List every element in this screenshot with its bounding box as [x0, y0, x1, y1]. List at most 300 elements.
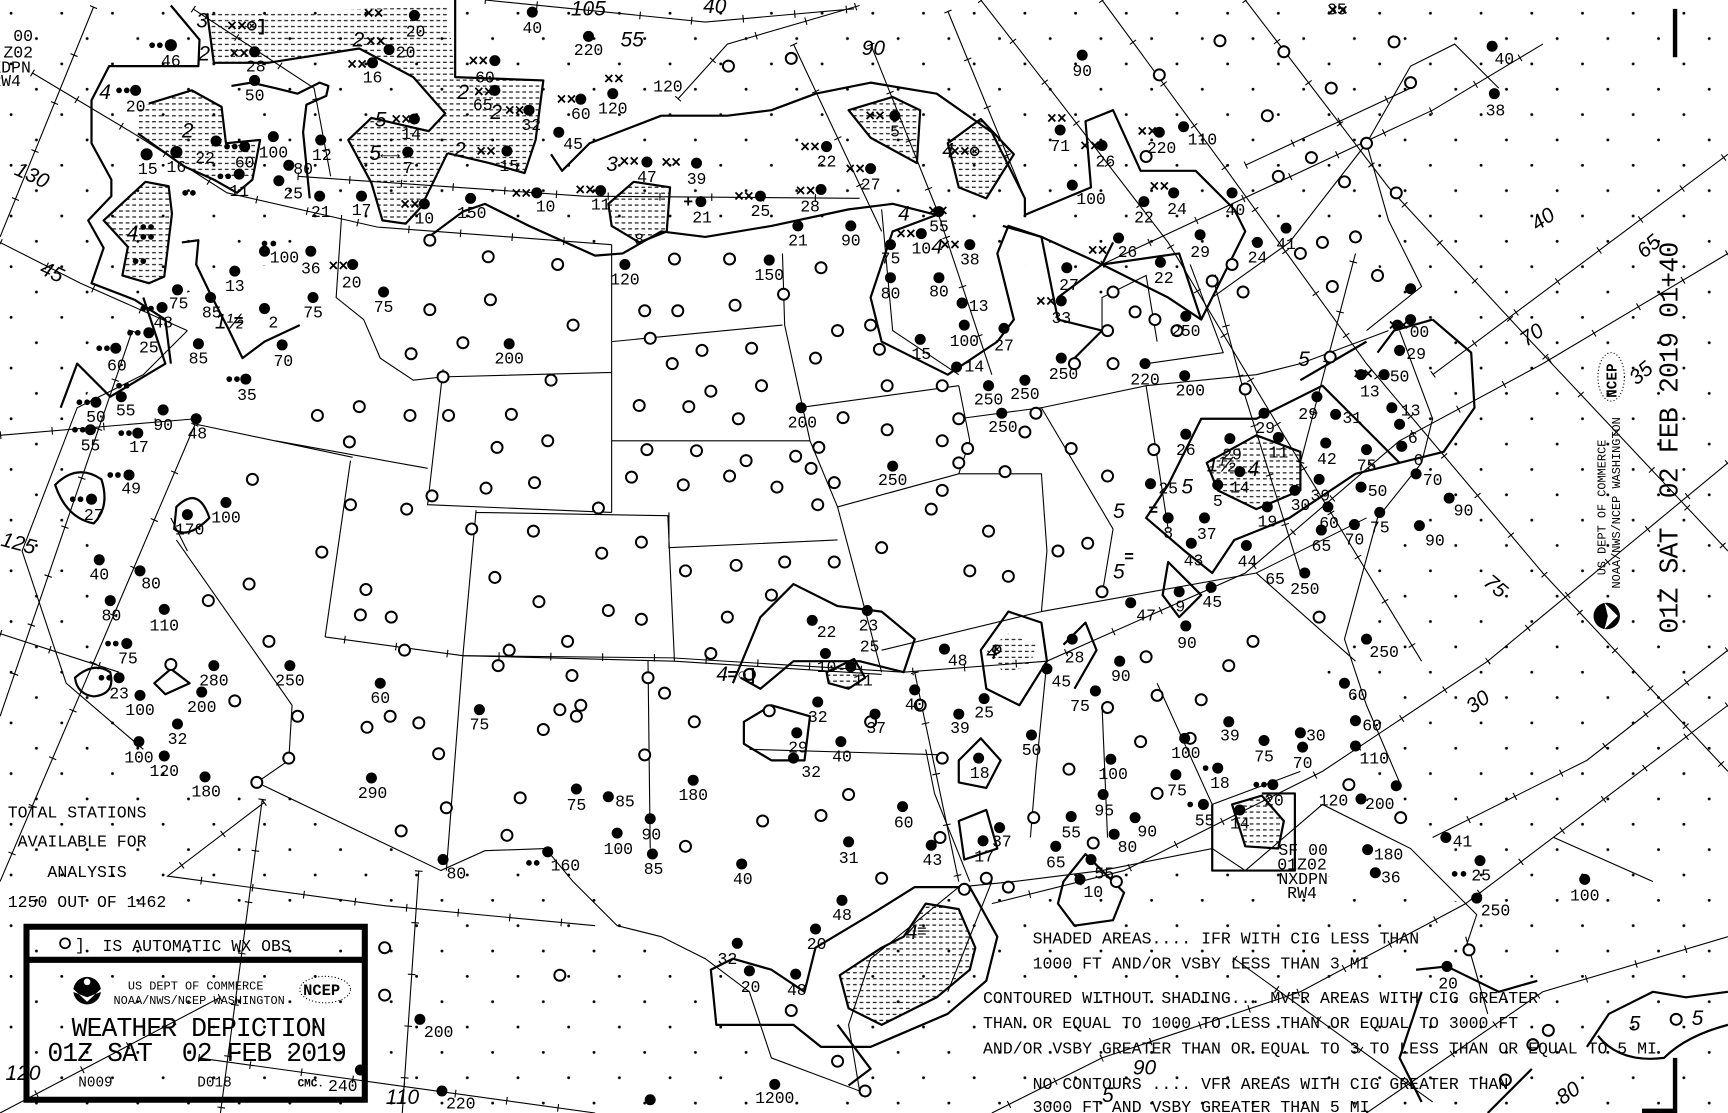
ceiling height labels: 85: [615, 793, 635, 812]
IFR shaded areas: [104, 7, 1300, 1025]
ceiling height labels: 49: [121, 480, 141, 499]
ceiling height labels: 26: [1176, 441, 1196, 460]
visibility values and grid labels: 55: [620, 28, 644, 51]
ceiling height labels: 150: [755, 266, 784, 285]
ceiling height labels: 100: [270, 248, 299, 267]
ceiling height labels: 20: [342, 274, 361, 293]
present weather snow and other symbols: ←→: [380, 145, 400, 164]
ceiling height labels: 200: [1175, 382, 1205, 401]
icon: rotated NCEP logo: NCEP: [1606, 363, 1622, 398]
visibility values and grid labels: 110: [386, 1086, 419, 1109]
ceiling height labels: 85: [644, 860, 663, 879]
present weather snow and other symbols: ××: [940, 236, 960, 255]
panel forecaster codes: [78, 1076, 324, 1092]
ceiling height labels: 5: [1213, 492, 1223, 511]
visibility values and grid labels: 2: [197, 43, 210, 66]
ceiling height labels: 37: [1197, 525, 1217, 544]
land mass clearing the ocean dot field: [66, 209, 1466, 1091]
ceiling height labels: 8: [1163, 524, 1173, 543]
present weather snow and other symbols: ××⊗]: [227, 17, 267, 36]
ceiling height labels: 100: [124, 749, 154, 768]
ceiling height labels: 17: [974, 848, 994, 867]
ceiling height labels: 25: [751, 202, 770, 221]
ceiling height labels: 32: [521, 116, 541, 135]
ceiling height labels: 80: [293, 160, 313, 179]
ceiling height labels: 11: [591, 195, 611, 214]
ceiling height labels: 45: [563, 135, 583, 154]
ceiling height labels: 29: [1190, 243, 1210, 262]
ceiling height labels: 25: [860, 637, 879, 656]
present weather snow and other symbols: ××: [796, 182, 816, 201]
ceiling height labels: 5: [890, 123, 900, 142]
ceiling height labels: 25: [283, 184, 303, 203]
ceiling height labels: 85: [189, 350, 208, 369]
ceiling height labels: 200: [187, 698, 216, 717]
ceiling height labels: 48: [832, 906, 852, 925]
ceiling height labels: 21: [788, 232, 808, 251]
ceiling height labels: 75: [881, 249, 900, 268]
ceiling height labels: 45: [1202, 593, 1222, 612]
present weather snow and other symbols: ××: [505, 102, 525, 121]
ceiling height labels: 20: [1264, 792, 1284, 811]
ceiling height labels: 25: [974, 703, 994, 722]
visibility values and grid labels: 3: [196, 10, 208, 33]
present weather snow and other symbols: ××: [845, 160, 865, 179]
ceiling height labels: 13: [969, 297, 988, 316]
present weather snow and other symbols: ××: [1047, 109, 1067, 128]
present weather snow and other symbols: ××: [364, 5, 384, 24]
ceiling height labels: 21: [311, 203, 331, 222]
present weather snow and other symbols: +: [683, 193, 693, 212]
ceiling height labels: 43: [923, 851, 942, 870]
present weather snow and other symbols: ××: [1088, 242, 1108, 261]
ceiling height labels: 10: [911, 239, 931, 258]
visibility values and grid labels: 3: [606, 153, 618, 176]
present weather snow and other symbols: ××: [328, 257, 348, 276]
registration mark: top right: [1673, 9, 1677, 57]
visibility values and grid labels: 4: [986, 641, 998, 664]
agency text: [114, 980, 285, 1008]
ceiling height labels: 29: [1298, 405, 1318, 424]
ceiling height labels: 75: [1357, 457, 1376, 476]
ceiling height labels: 180: [1374, 846, 1403, 865]
ceiling height labels: 10: [415, 210, 434, 229]
ceiling height labels: 250: [1290, 580, 1319, 599]
visibility values and grid labels: 65: [1633, 230, 1666, 263]
ceiling height labels: 55: [929, 217, 949, 236]
ceiling height labels: 20: [741, 978, 760, 997]
ceiling height labels: 24: [1167, 200, 1187, 219]
ceiling height labels: 90: [642, 826, 661, 845]
ceiling height labels: 80: [881, 285, 900, 304]
ceiling height labels: 30: [1291, 496, 1310, 515]
legend notes: flight category definitions: 1000 FT AND/OR VSBY LESS THAN 3 MI: [1033, 955, 1370, 974]
ceiling height labels: 13: [1360, 383, 1380, 402]
ceiling height labels: 2: [268, 313, 278, 332]
visibility values and grid labels: 2: [352, 28, 365, 51]
ceiling height labels: 220: [574, 41, 603, 60]
ceiling height labels: 10: [1083, 883, 1103, 902]
visibility values and grid labels: 2: [181, 120, 194, 143]
present weather snow and other symbols: ××: [619, 152, 639, 171]
legend notes: flight category definitions: SHADED AREAS.... IFR WITH CIG LESS THAN: [1033, 929, 1419, 948]
ceiling height labels: 60: [1362, 717, 1382, 736]
ceiling height labels: 32: [168, 730, 187, 749]
visibility values and grid labels: 5: [1113, 500, 1125, 523]
present weather snow and other symbols: ××: [1080, 137, 1100, 156]
ceiling height labels: 40: [905, 696, 924, 715]
ceiling height labels: 29: [1255, 419, 1275, 438]
present weather snow and other symbols: ××: [865, 107, 885, 126]
ceiling height labels: 23: [109, 685, 129, 704]
visibility values and grid labels: 4: [898, 202, 910, 225]
ceiling height labels: 60: [1319, 514, 1339, 533]
present weather snow and other symbols: ××: [511, 184, 531, 203]
chart id block, lower: NXDPN: [1278, 870, 1328, 889]
ceiling height labels: 25: [139, 339, 159, 358]
visibility values and grid labels: 4: [716, 663, 728, 686]
ceiling height labels: 20: [406, 22, 425, 41]
ceiling height labels: 10: [817, 658, 836, 677]
present weather snow and other symbols: ××: [604, 70, 624, 89]
visibility values and grid labels: 5: [1102, 1084, 1114, 1107]
present weather snow and other symbols: ××: [661, 154, 681, 173]
total stations text block: TOTAL STATIONS: [8, 804, 147, 823]
panel forecaster codes: D018: [197, 1076, 232, 1092]
ceiling height labels: 11: [229, 182, 249, 201]
ceiling height labels: 48: [948, 652, 967, 671]
ceiling height labels: 250: [1049, 365, 1078, 384]
ceiling height labels: 27: [84, 506, 104, 525]
ceiling height labels: 39: [687, 170, 706, 189]
ceiling height labels: 29: [788, 739, 808, 758]
ceiling height labels: 17: [129, 438, 149, 457]
ceiling height labels: 21: [692, 209, 712, 228]
ceiling height labels: 180: [678, 786, 708, 805]
present weather snow and other symbols: ××: [476, 142, 496, 161]
ceiling height labels: 90: [841, 232, 861, 251]
ceiling height labels: 50: [1368, 482, 1387, 501]
ceiling height labels: 48: [787, 981, 807, 1000]
agency text: NOAA/NWS/NCEP WASHINGTON: [114, 994, 285, 1008]
ceiling height labels: 100: [125, 701, 155, 720]
ceiling height labels: 11: [1269, 443, 1288, 462]
icon: NCEP logo: [300, 976, 350, 1003]
chart id block, upper left: [0, 27, 33, 91]
ceiling height labels: 160: [551, 857, 580, 876]
ceiling height labels: 100: [950, 332, 979, 351]
total stations text block: AVAILABLE FOR: [18, 832, 147, 851]
ceiling height labels: 55: [1195, 811, 1214, 830]
chart id block, upper left: Z02: [3, 43, 33, 62]
ceiling height labels: 11: [853, 671, 873, 690]
ceiling height labels: 100: [1171, 744, 1200, 763]
total stations text block: ANALYSIS: [47, 863, 127, 882]
present weather snow and other symbols: ××: [734, 188, 754, 207]
ceiling height labels: 9: [1175, 598, 1185, 617]
ceiling height labels: 60: [894, 814, 913, 833]
ceiling height labels: 20: [126, 97, 145, 116]
visibility values and grid labels: 5: [375, 109, 387, 132]
ceiling height labels: 00: [1410, 323, 1429, 342]
ceiling height labels: 28: [246, 58, 266, 77]
ceiling height labels: 55: [1061, 824, 1081, 843]
present weather snow and other symbols: ××: [1149, 178, 1169, 197]
ceiling height labels: 110: [1188, 130, 1217, 149]
ceiling height labels: 37: [992, 832, 1012, 851]
ceiling height labels: 31: [839, 849, 859, 868]
visibility values and grid labels: 5: [1298, 348, 1310, 371]
ceiling height labels: 22: [1154, 269, 1174, 288]
ceiling height labels: 120: [1319, 792, 1348, 811]
ceiling height labels: 70: [1345, 530, 1364, 549]
ceiling height labels: 90: [1137, 822, 1157, 841]
ceiling height labels: 50: [86, 408, 106, 427]
visibility values and grid labels: 2: [489, 101, 502, 124]
chart id block, lower: RW4: [1287, 884, 1317, 903]
visibility values and grid labels: 2: [456, 81, 469, 104]
ceiling height labels: 250: [1481, 902, 1510, 921]
box frame: [26, 927, 365, 1100]
ceiling height labels: 47: [637, 168, 657, 187]
rotated agency credit: US DEPT OF COMMERCE: [1596, 440, 1610, 575]
legend notes: flight category definitions: AND/OR VSBY GREATER THAN OR EQUAL TO 3 TO LESS THAN OR EQUAL TO 5 MI: [983, 1039, 1657, 1058]
ceiling height labels: 180: [191, 783, 221, 802]
ceiling height labels: 44: [1238, 552, 1257, 571]
ceiling height labels: 290: [358, 784, 387, 803]
visibility values and grid labels: 5: [1692, 1007, 1704, 1030]
ceiling height labels: 250: [1010, 385, 1040, 404]
ceiling height labels: 14: [401, 125, 421, 144]
ceiling height labels: 120: [150, 762, 179, 781]
ceiling height labels: 110: [150, 616, 179, 635]
ceiling height labels: 22: [195, 149, 215, 168]
present weather snow and other symbols: ××: [928, 202, 948, 221]
ceiling height labels: 22: [817, 152, 836, 171]
ceiling height labels: 250: [878, 471, 907, 490]
ceiling height labels: 170: [175, 520, 204, 539]
ceiling height labels: 120: [598, 100, 627, 119]
ceiling height labels: 200: [1365, 795, 1394, 814]
ceiling height labels: 110: [1360, 750, 1389, 769]
ceiling height labels: 41: [1453, 832, 1472, 851]
ceiling height labels: 20: [1438, 974, 1458, 993]
present weather snow and other symbols: ××: [468, 52, 488, 71]
ceiling height labels: 16: [167, 158, 186, 177]
ceiling height labels: 75: [303, 303, 323, 322]
ceiling height labels: 41: [1276, 235, 1296, 254]
ceiling height labels: 15: [911, 345, 931, 364]
ceiling height labels: 40: [1494, 50, 1514, 69]
ceiling height labels: 29: [1406, 345, 1426, 364]
present weather snow and other symbols: =: [1124, 548, 1134, 567]
chart id block, lower: 01Z02: [1277, 855, 1327, 874]
ceiling height labels: 100: [1570, 886, 1599, 905]
ceiling height labels: 28: [800, 198, 820, 217]
ceiling height labels: 31: [1342, 409, 1362, 428]
ceiling height labels: 7: [403, 159, 413, 178]
present weather snow and other symbols: ××: [896, 225, 916, 244]
legend notes: flight category definitions: CONTOURED WITHOUT SHADING... MVFR AREAS WITH CIG GREATER: [983, 989, 1538, 1008]
visibility values and grid labels: 4: [99, 81, 111, 104]
ceiling height labels: 42: [1317, 450, 1337, 469]
ceiling height labels: 80: [102, 606, 121, 625]
ceiling height labels: 75: [1070, 697, 1090, 716]
ceiling height labels: 55: [81, 437, 100, 456]
ceiling height labels: 80: [446, 864, 466, 883]
ceiling height labels: 80: [141, 574, 161, 593]
ceiling height labels: 75: [1167, 782, 1187, 801]
total stations text block: 1250 OUT OF 1462: [8, 893, 166, 912]
present weather snow and other symbols: ××: [1036, 292, 1056, 311]
ceiling height labels: 27: [994, 336, 1014, 355]
visibility values and grid labels: 130: [11, 158, 53, 194]
ceiling height labels: 250: [275, 671, 305, 690]
present weather snow and other symbols: =○]: [727, 666, 757, 685]
ceiling height labels: 75: [118, 649, 138, 668]
ceiling height labels: 120: [610, 270, 640, 289]
visibility values and grid labels: 35: [1625, 357, 1658, 390]
visibility values and grid labels: 4: [906, 921, 918, 944]
title box: [26, 927, 365, 1100]
ceiling height labels: 47: [1136, 606, 1156, 625]
visibility values and grid labels: 5: [1113, 561, 1125, 584]
visibility values and grid labels: 75: [1479, 570, 1512, 603]
icon: NCEP logo: NCEP: [303, 982, 340, 1000]
ceiling height labels: 60: [107, 356, 127, 375]
present weather snow and other symbols: ××: [229, 44, 249, 63]
ceiling height labels: 250: [988, 418, 1018, 437]
ceiling height labels: 55: [1094, 864, 1114, 883]
present weather snow and other symbols: ××: [347, 55, 367, 74]
ceiling height labels: 200: [788, 414, 817, 433]
visibility values and grid labels: 4: [1247, 458, 1259, 481]
present weather snow and other symbols: ××⊗: [950, 142, 980, 161]
ceiling height labels: 8: [634, 231, 644, 250]
ceiling height labels: 90: [1425, 531, 1445, 550]
ceiling height labels: 39: [1310, 486, 1330, 505]
ceiling height labels: 32: [808, 708, 828, 727]
ceiling height labels: 75: [1370, 518, 1390, 537]
ceiling height labels: 75: [567, 796, 586, 815]
icon: rotated NOAA logo: [1594, 603, 1620, 629]
ceiling height labels: 1200: [755, 1089, 794, 1108]
ceiling height labels: 38: [960, 250, 980, 269]
present weather snow and other symbols: ××: [1353, 365, 1373, 384]
ceiling height labels: 150: [457, 204, 486, 223]
present weather snow and other symbols: ××: [800, 138, 820, 157]
present weather snow and other symbols: ××: [474, 83, 494, 102]
ceiling height labels: 13: [225, 277, 245, 296]
ceiling height labels: 20: [396, 43, 415, 62]
ceiling height labels: 80: [929, 282, 949, 301]
ceiling height labels: 90: [1111, 667, 1131, 686]
ceiling height labels: 26: [1118, 243, 1137, 262]
ceiling height labels: 65: [1046, 853, 1066, 872]
ceiling height labels: 19: [1258, 513, 1277, 532]
total stations text block: [8, 804, 166, 912]
ceiling height labels: 50: [1022, 741, 1041, 760]
visibility values and grid labels: 2: [453, 138, 466, 161]
present weather snow and other symbols: ××: [1389, 317, 1408, 336]
ceiling height labels: 60: [571, 105, 591, 124]
ceiling height labels: 220: [1147, 139, 1176, 158]
automatic observation note: ]: [75, 936, 85, 955]
ceiling height labels: 90: [1454, 502, 1473, 521]
ceiling height labels: 35: [237, 386, 257, 405]
ceiling height labels: 45: [1051, 673, 1071, 692]
ceiling height labels: 60: [235, 154, 254, 173]
ceiling height labels: 95: [1094, 801, 1114, 820]
ceiling height labels: 24: [1248, 248, 1267, 267]
ceiling height labels: 6: [1413, 451, 1423, 470]
ceiling height labels: 40: [522, 19, 542, 38]
ceiling height labels: 75: [374, 298, 393, 317]
visibility values and grid labels: 5: [369, 142, 381, 165]
ceiling height labels: 65: [1265, 570, 1285, 589]
visibility values and grid labels: 4: [931, 235, 943, 258]
ceiling height labels: 100: [1076, 190, 1106, 209]
present weather snow and other symbols: ××: [557, 91, 576, 110]
ceiling height labels: 25: [1471, 866, 1491, 885]
ceiling height labels: 100: [1098, 765, 1128, 784]
ceiling height labels: 18: [1210, 774, 1230, 793]
visibility values and grid labels: 45: [37, 257, 68, 288]
ceiling height labels: 32: [718, 950, 737, 969]
present weather snow and other symbols: ≡: [917, 923, 927, 942]
ceiling height labels: 55: [116, 401, 135, 420]
present weather snow and other symbols: ⊗: [992, 641, 1002, 660]
ceiling height labels: 200: [494, 350, 524, 369]
chart id block, lower: 00: [1308, 841, 1328, 860]
ceiling height labels: 36: [1381, 869, 1401, 888]
ceiling height labels: 100: [259, 144, 288, 163]
ceiling height labels: 75: [169, 295, 188, 314]
chart id block, lower: SF: [1278, 841, 1298, 860]
ceiling height labels: 16: [363, 69, 382, 88]
ceiling height labels: 85: [202, 303, 221, 322]
ceiling height labels: 22: [817, 623, 836, 642]
legend notes: flight category definitions: THAN OR EQUAL TO 1000 TO LESS THAN OR EQUAL TO 3000 FT: [983, 1014, 1518, 1033]
ceiling height labels: 220: [1130, 371, 1160, 390]
ceiling height labels: 120: [653, 77, 683, 96]
visibility values and grid labels: 90: [1133, 1056, 1157, 1079]
ceiling height labels: 60: [370, 689, 390, 708]
automatic observation note: IS AUTOMATIC WX OBS: [103, 937, 291, 956]
visibility values and grid labels: 4: [127, 222, 138, 245]
ceiling height labels: 71: [1050, 137, 1070, 156]
ceiling height labels: 60: [475, 69, 495, 88]
ceiling height labels: 33: [1051, 309, 1071, 328]
present weather snow and other symbols: [227, 1, 1408, 942]
ceiling height labels: 75: [470, 716, 489, 735]
visibility values and grid labels: 80: [1552, 1077, 1585, 1109]
legend notes: flight category definitions: NO CONTOURS .... VFR AREAS WITH CIG GREATER THAN: [1033, 1075, 1508, 1094]
rotated agency credit: [1596, 417, 1624, 588]
present weather snow and other symbols: ××: [391, 111, 411, 130]
ceiling height labels: 28: [1065, 648, 1084, 667]
ceiling height labels: 27: [1059, 276, 1079, 295]
ceiling height labels: 280: [199, 671, 229, 690]
present weather snow and other symbols: ××: [575, 181, 595, 200]
ceiling height labels: 75: [1254, 747, 1274, 766]
ceiling height labels: 14: [1230, 479, 1250, 498]
ceiling height labels: 20: [807, 935, 826, 954]
ceiling height labels: 250: [1171, 322, 1200, 341]
ceiling height labels: 23: [859, 616, 878, 635]
registration mark: bottom right: [1642, 1058, 1675, 1111]
visibility values and grid labels: 1½: [215, 310, 244, 333]
